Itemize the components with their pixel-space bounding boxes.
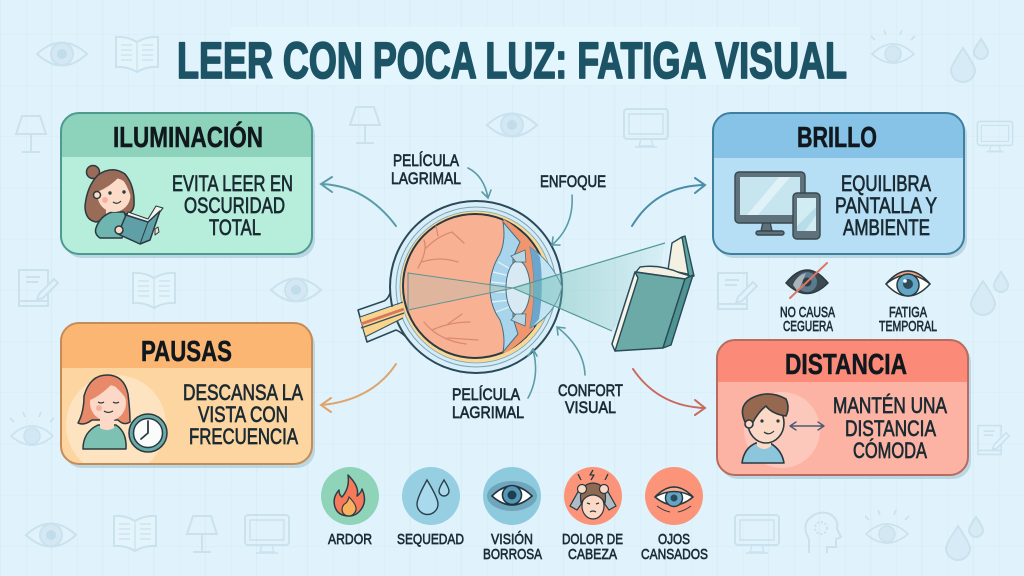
label: película lagrimal top: PELÍCULA <box>393 151 460 170</box>
icon: tired eye <box>655 487 693 512</box>
panel: pausas <box>61 323 315 475</box>
panel: brillo <box>713 113 967 258</box>
heading: DISTANCIA <box>785 349 907 381</box>
icon: water drops <box>417 480 449 514</box>
icon: girl reading <box>85 166 163 244</box>
heading: ILUMINACIÓN <box>113 120 263 154</box>
icon: monitor and phone <box>735 172 820 239</box>
light beam from book <box>513 243 665 331</box>
optic nerve sheath <box>358 285 414 345</box>
label: película lagrimal bottom: PELÍCULA <box>452 385 521 404</box>
label: no causa ceguera: CEGUERA <box>783 318 833 335</box>
sclera <box>390 201 562 373</box>
symptom: sequedad: SEQUEDAD <box>397 531 464 548</box>
text block: DESCANSA LA <box>183 380 303 405</box>
icon: open book <box>612 236 694 351</box>
label: confort visual: VISUAL <box>565 398 616 417</box>
text block: FRECUENCIA <box>189 424 298 449</box>
symptom: visión borrosa: BORROSA <box>483 546 542 563</box>
symptom: ojos cansados <box>641 467 708 563</box>
symptom: ardor <box>321 467 379 548</box>
label: no causa ceguera <box>780 304 835 335</box>
symptom: dolor de cabeza: DOLOR DE <box>562 531 623 548</box>
heading: BRILLO <box>797 122 877 154</box>
label: fatiga temporal: FATIGA <box>889 304 927 321</box>
blood vessels <box>418 226 478 344</box>
symptom: sequedad <box>397 467 464 548</box>
text block: AMBIENTE <box>843 215 930 240</box>
icon: boy with distance arrow <box>742 394 824 463</box>
icon: no causa ceguera <box>786 263 828 298</box>
symptom: visión borrosa <box>483 467 542 563</box>
text block <box>835 171 937 240</box>
text block <box>833 393 947 463</box>
text block: PANTALLA Y <box>835 193 937 218</box>
symptom: dolor de cabeza: CABEZA <box>568 546 617 563</box>
text block: EVITA LEER EN <box>172 171 293 196</box>
cornea <box>530 247 562 328</box>
text block <box>172 171 293 240</box>
panel: iluminación <box>61 113 315 258</box>
arrow: to pausas <box>321 364 396 412</box>
panel: distancia <box>717 340 971 479</box>
icon: head in pain <box>570 470 616 519</box>
label: confort visual <box>558 381 623 417</box>
label: fatiga temporal <box>879 304 937 335</box>
label: película lagrimal top: LAGRIMAL <box>391 169 461 188</box>
symptom: ojos cansados: OJOS <box>658 531 690 548</box>
icon: blurred eye <box>492 486 532 505</box>
label: película lagrimal bottom <box>452 385 524 422</box>
text block: EQUILIBRA <box>841 171 931 196</box>
label: película lagrimal bottom: LAGRIMAL <box>452 403 524 422</box>
text block: TOTAL <box>209 215 261 240</box>
text block: VISTA CON <box>198 402 288 427</box>
retina <box>403 214 547 358</box>
symptom: ardor: ARDOR <box>328 531 372 548</box>
arrow: película bottom <box>528 349 537 398</box>
arrow: película top <box>468 168 491 198</box>
arrow: to brillo <box>632 178 705 226</box>
text block: CÓMODA <box>853 438 927 463</box>
light beam into retina <box>408 273 513 310</box>
arrow: confort <box>557 327 585 375</box>
label: confort visual: CONFORT <box>558 381 623 400</box>
label: no causa ceguera: NO CAUSA <box>780 304 835 321</box>
arrow: enfoque <box>552 195 572 245</box>
icon: woman resting and clock <box>78 375 167 452</box>
label: enfoque: ENFOQUE <box>540 172 606 191</box>
label: fatiga temporal: TEMPORAL <box>879 318 937 335</box>
diagram: eye anatomy <box>358 201 665 373</box>
text block <box>183 380 303 449</box>
text block: MANTÉN UNA <box>833 393 947 418</box>
heading: PAUSAS <box>141 336 232 368</box>
symptom: visión borrosa: VISIÓN <box>491 531 533 548</box>
ciliary body and iris <box>490 219 534 354</box>
text block: OSCURIDAD <box>184 193 285 218</box>
label: película lagrimal top <box>391 151 461 188</box>
icon: fatiga temporal <box>886 271 930 296</box>
symptom: ojos cansados: CANSADOS <box>641 546 708 563</box>
arrow: to distancia <box>633 369 705 415</box>
icon: flame <box>334 475 364 516</box>
text block: DISTANCIA <box>845 416 936 441</box>
symptom: dolor de cabeza <box>562 467 623 563</box>
arrow: to iluminación <box>321 177 396 226</box>
optic nerve core <box>360 302 404 337</box>
